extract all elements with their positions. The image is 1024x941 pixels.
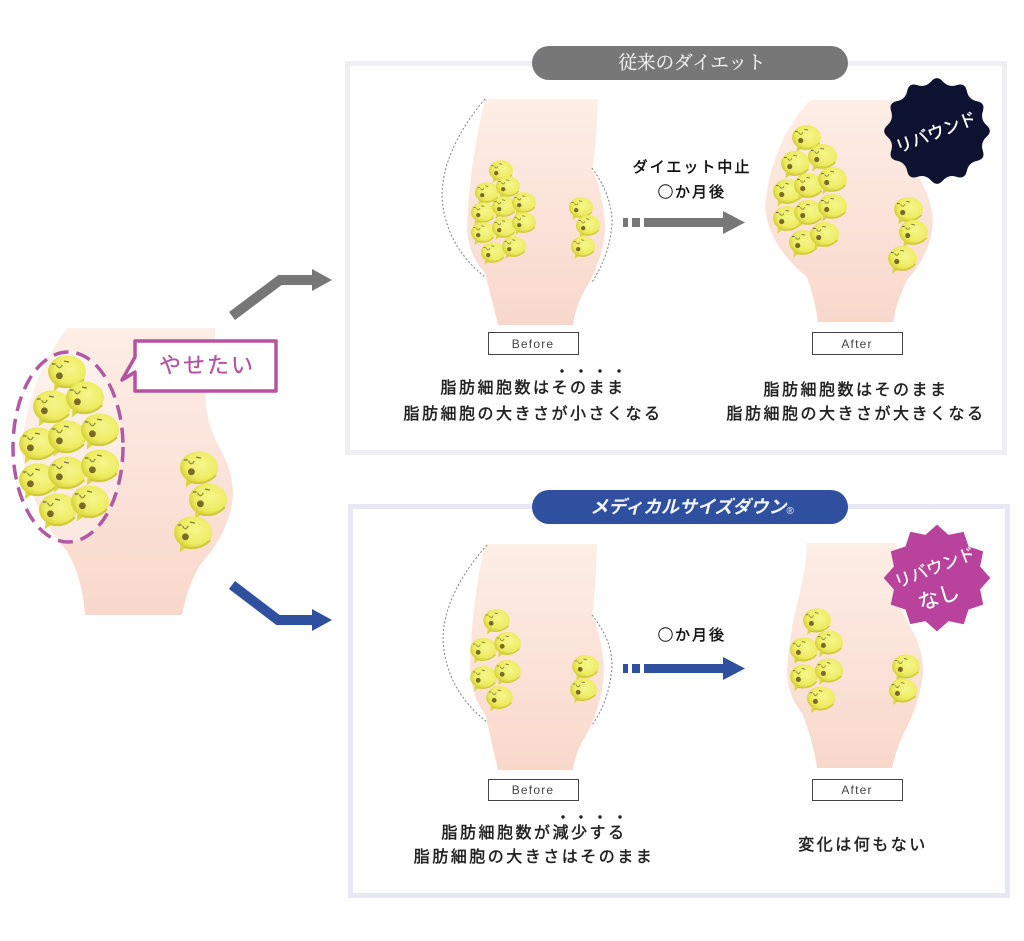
heading: メディカルサイズダウン: メディカルサイズダウン [590,497,786,517]
heading: 従来のダイエット: 従来のダイエット [618,53,766,74]
arrow: blue time passing [623,657,745,680]
badge: リバウンドなし [874,515,1000,641]
fat cells [790,608,920,713]
before figure [443,544,612,770]
dotted previous outline left [443,545,487,722]
body silhouette [22,328,233,615]
fat cells [471,160,600,265]
panel: medical size down [350,490,1008,896]
arrow: blue to medical size down [232,585,332,631]
body [787,543,923,768]
before figure [442,99,612,325]
caption: after: 脂肪細胞数はそのまま [763,381,949,399]
panel frame [350,506,1008,896]
label: After: After [841,337,873,351]
caption: before: 脂肪細胞数が減少する [441,824,627,842]
label: time after stopping diet [633,159,751,201]
label: Before [488,332,578,354]
label: time after stopping diet: ダイエット中止 [633,159,751,176]
heading: メディカルサイズダウン [532,490,848,524]
panel frame [348,64,1004,452]
caption: before: 脂肪細胞数はそのまま [440,379,626,397]
dotted previous outline right [592,615,612,725]
dashed ellipse around left fat cells [13,352,123,542]
badge: リバウンド [874,68,1000,194]
caption: before: 脂肪細胞の大きさが小さくなる [403,405,663,423]
label: Before: Before [512,337,554,351]
fat cells: right group [174,451,227,552]
heading: メディカルサイズダウン: ® [786,506,794,517]
body [470,544,604,770]
caption: after [726,381,986,423]
label: time after stopping diet: ◯か月後 [658,184,726,201]
main figure: body before dieting [13,328,276,615]
dotted previous outline right [592,168,612,282]
label: After [812,332,902,354]
label: Before: Before [512,783,554,797]
speech bubble: やせたい: やせたい [159,353,255,378]
label: After [812,780,902,800]
arrow: gray time passing [623,211,745,234]
body [765,100,933,322]
caption: after: 脂肪細胞の大きさが大きくなる [726,405,986,423]
fat cells [470,609,599,711]
label: Before [488,780,578,800]
label: time passing: ◯か月後 [658,627,726,644]
badge: リバウンドなし: リバウンド [892,544,978,592]
panel: conventional diet [348,46,1004,452]
caption: after: 変化は何もない [798,836,928,854]
badge: リバウンド: リバウンド [893,109,979,157]
after figure [765,100,933,322]
label: After: After [841,783,873,797]
fat cells [773,125,928,273]
heading: 従来のダイエット [532,46,848,80]
badge: リバウンドなし: なし [915,580,963,615]
caption: before [414,815,654,866]
caption: before: 脂肪細胞の大きさはそのまま [414,848,654,866]
fat cells: left group [19,355,119,530]
speech bubble: やせたい [122,341,276,391]
after figure [787,543,923,768]
caption: before [403,369,663,423]
dotted previous outline left [442,99,485,277]
arrow: gray to conventional diet [232,269,332,316]
body [467,99,605,325]
